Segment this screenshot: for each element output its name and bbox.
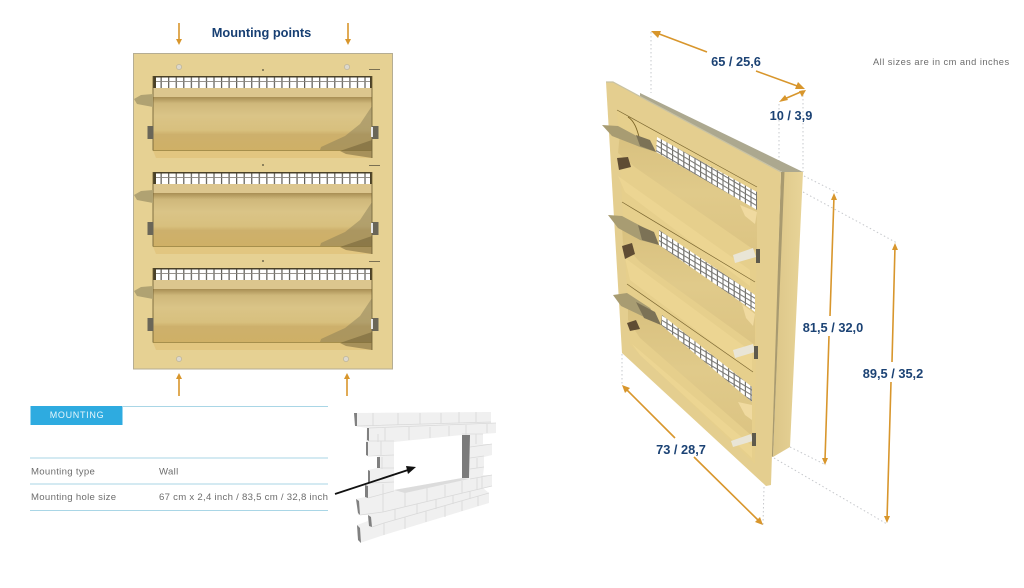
mounting screws [176, 64, 350, 362]
dimension: height 73 / 28,7: 73 / 28,7 [656, 442, 706, 457]
recess [617, 110, 757, 464]
rear box side [773, 172, 803, 457]
louvre section 3 [134, 268, 378, 350]
louvre 2 [608, 202, 758, 372]
value: hole size: 67 cm x 2,4 inch / 83,5 cm / 32,8 inch [159, 492, 328, 503]
value: wall: Wall [159, 466, 178, 478]
small frame marks [262, 69, 380, 262]
rear box top [640, 93, 803, 172]
sill [394, 478, 469, 493]
opening [394, 435, 462, 490]
dimension: depth 10 / 3,9 [770, 90, 812, 123]
brick end faces [354, 413, 380, 543]
badge: MOUNTING: MOUNTING [50, 410, 104, 420]
louvre section 1 [134, 76, 378, 158]
row: mounting hole size: Mounting hole size [31, 492, 116, 503]
black arrow to mounting hole [335, 466, 416, 494]
dimension: height 81,5 / 32,0 [803, 193, 863, 465]
dimension: depth 10 / 3,9: 10 / 3,9 [770, 108, 812, 123]
dimension: width 65 / 25,6: 65 / 25,6 [711, 54, 761, 69]
note: units: All sizes are in cm and inches [873, 57, 1010, 67]
dimension: height 81,5 / 32,0: 81,5 / 32,0 [803, 320, 863, 335]
row: mounting type: Mounting type [31, 466, 95, 478]
brick joints [357, 412, 496, 535]
dimension: height 89,5 / 35,2: 89,5 / 35,2 [863, 366, 923, 381]
badge: MOUNTING [30, 406, 122, 425]
front view of louvre panel [134, 54, 392, 369]
perspective view of louvre panel [602, 82, 803, 486]
mounting table [30, 406, 328, 510]
louvre section 2 [134, 172, 378, 254]
heading: Mounting points: Mounting points [212, 25, 311, 40]
dimension: width 65 / 25,6 [651, 31, 805, 89]
opening side face [462, 435, 470, 478]
louvre 1 [602, 110, 760, 286]
frame front [606, 82, 781, 486]
outer frame [134, 54, 392, 369]
gap line [771, 172, 784, 457]
dotted extension lines [622, 32, 897, 525]
dimension: height 89,5 / 35,2 [863, 243, 923, 523]
mounting point arrows [176, 23, 351, 396]
dimension: height 73 / 28,7 [622, 385, 763, 525]
brick wall with opening [354, 412, 496, 543]
louvre 3 [613, 284, 756, 458]
